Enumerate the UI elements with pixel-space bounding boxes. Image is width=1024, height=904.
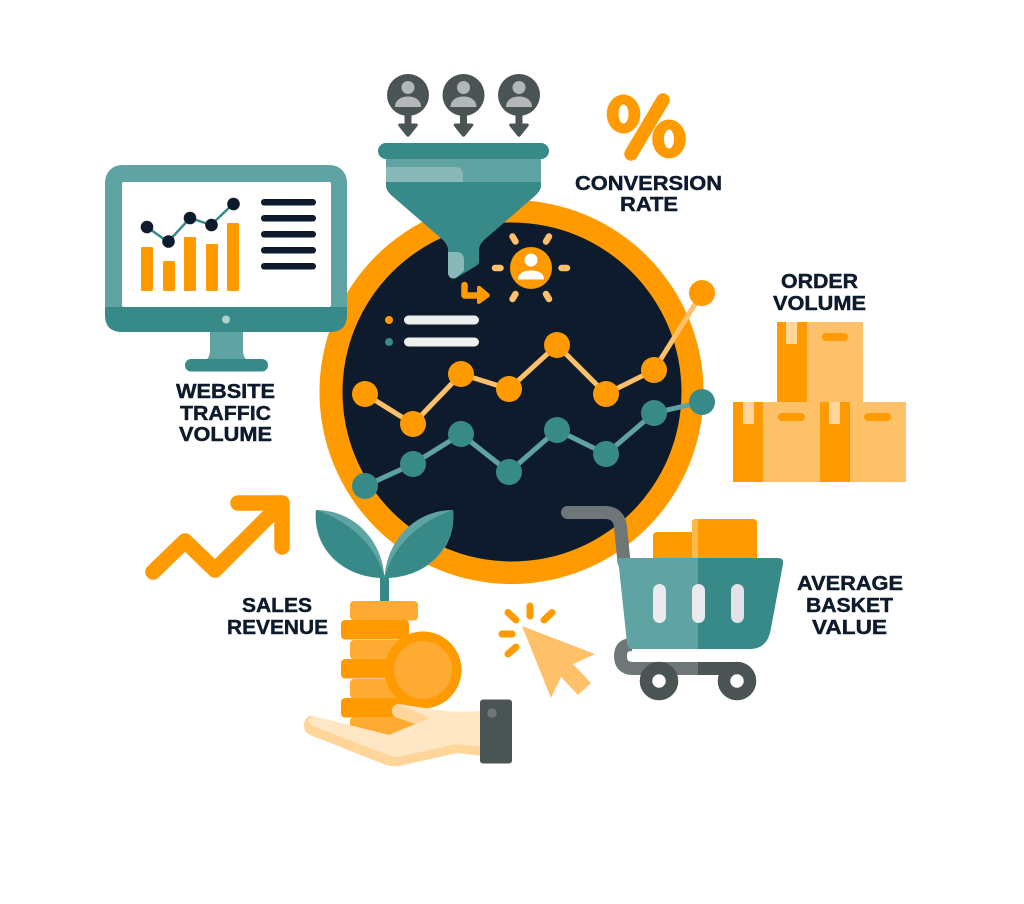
heading: average basket value: AVERAGE	[797, 572, 903, 595]
panel: central circle	[320, 200, 704, 584]
monitor bar chart	[141, 223, 239, 291]
heading: average basket value: BASKET	[806, 594, 893, 617]
line chart: orange series	[352, 280, 715, 437]
icon: stacked boxes	[733, 322, 906, 482]
icon: small funnel output arrow	[464, 285, 490, 304]
icon: hand holding coins	[304, 700, 512, 766]
heading: website traffic volume: VOLUME	[179, 423, 272, 446]
heading: order volume	[773, 270, 866, 315]
heading: sales revenue: SALES	[242, 594, 312, 617]
chart legend	[385, 316, 479, 346]
heading: sales revenue	[227, 594, 328, 639]
icon: three visitors with arrows	[387, 74, 540, 137]
icon: percent	[607, 94, 686, 158]
icon: monitor with dashboard	[105, 165, 347, 372]
icon: shopping cart	[568, 512, 783, 694]
heading: website traffic volume: TRAFFIC	[180, 402, 271, 425]
icon: cursor click	[502, 606, 595, 698]
icon: coin stack	[341, 601, 462, 736]
icon: converted visitor with rays	[495, 236, 567, 299]
heading: website traffic volume: WEBSITE	[176, 380, 275, 403]
cart goods	[653, 519, 757, 558]
heading: order volume: VOLUME	[773, 292, 866, 315]
line chart: teal series	[352, 389, 715, 499]
heading: conversion rate: CONVERSION	[575, 172, 722, 195]
heading: average basket value: VALUE	[812, 616, 887, 639]
heading: order volume: ORDER	[781, 270, 858, 293]
heading: sales revenue: REVENUE	[227, 616, 328, 639]
heading: website traffic volume	[176, 380, 275, 446]
heading: conversion rate: RATE	[620, 193, 678, 216]
heading: conversion rate	[575, 172, 722, 216]
monitor text lines	[261, 199, 316, 270]
heading: average basket value	[797, 572, 903, 639]
cart wheels	[646, 668, 750, 694]
icon: plant sprout	[316, 510, 453, 602]
icon: funnel	[378, 143, 549, 278]
icon: growth arrow	[153, 503, 282, 572]
monitor line chart	[141, 198, 240, 248]
